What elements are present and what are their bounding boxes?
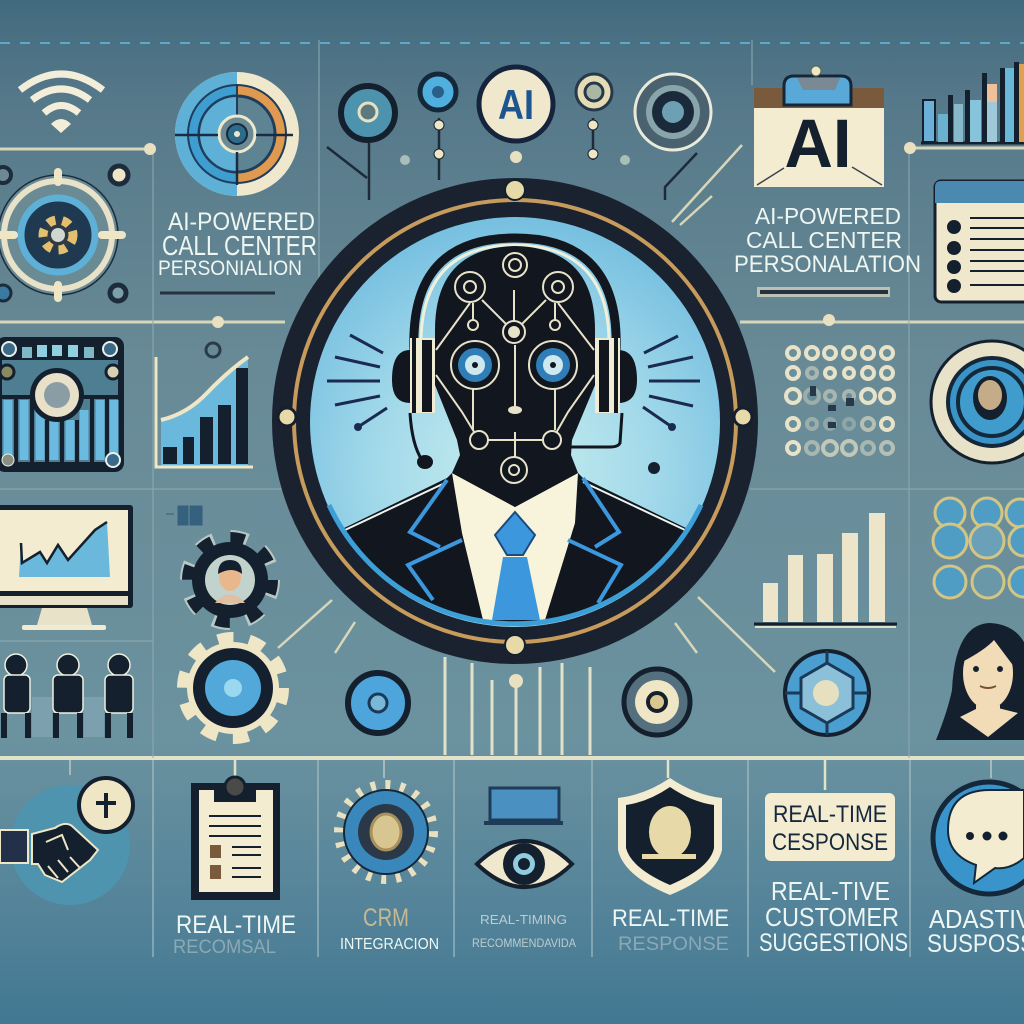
icon: bar chart top right: [921, 62, 1024, 143]
bottom labels: RECOMMENDAVIDA: [472, 936, 576, 950]
callout: real-time response: [765, 793, 895, 861]
icon: shield: [618, 778, 722, 895]
bottom labels: SUGGESTIONS: [759, 929, 908, 957]
top dashed line: [0, 42, 1024, 44]
bottom labels: CUSTOMER: [765, 902, 899, 932]
central circle badge: [272, 178, 758, 664]
bottom labels: INTEGRACION: [340, 936, 439, 953]
left heading: [158, 208, 317, 293]
lower ring icons: [348, 651, 869, 735]
icon: wifi: [20, 74, 103, 133]
icon: person gear: [187, 537, 273, 623]
bottom labels: [173, 876, 1024, 958]
left heading: CALL CENTER: [162, 230, 317, 261]
icon: speech bubble: [933, 782, 1024, 894]
left heading: PERSONIALION: [158, 257, 302, 280]
icon: woman portrait: [936, 623, 1024, 740]
icon: AI envelope: AI: [784, 105, 852, 182]
icon: target dial: [175, 72, 299, 196]
right panel: dot matrix: [786, 347, 894, 455]
icon: left grid panel: [0, 337, 124, 472]
right heading: CALL CENTER: [746, 227, 902, 253]
right heading: AI-POWERED: [755, 203, 901, 229]
icon: right profile ring: [931, 341, 1024, 463]
icon: handshake: [0, 778, 133, 905]
callout: real-time response: REAL-TIME: [773, 801, 887, 828]
bottom labels: RESPONSE: [618, 934, 729, 955]
icon: blue gear: [184, 639, 282, 737]
bottom labels: REAL-TIME: [612, 905, 729, 932]
icon: right circle grid: [933, 498, 1024, 598]
icon: eye: [477, 841, 572, 887]
robot agent figure: [327, 238, 700, 640]
bottom labels: REAL-TIVE: [771, 876, 890, 906]
icon: laptop: [484, 788, 563, 825]
icon: monitor: [0, 505, 133, 630]
icon: list window: [935, 181, 1024, 302]
icon: clipboard: [191, 777, 280, 900]
icon: left gear ring: [0, 166, 128, 301]
bottom labels: REAL-TIME: [176, 911, 296, 939]
icon: sun badge: [339, 785, 433, 879]
bottom labels: CRM: [363, 904, 409, 932]
icon: bars right: [754, 513, 897, 627]
bottom labels: RECOMSAL: [173, 937, 276, 958]
icon: three people: [4, 654, 133, 738]
panel: bottom row: [0, 777, 1024, 958]
icon: AI envelope: [754, 66, 884, 187]
top icon row: [341, 67, 711, 159]
right heading: [734, 203, 921, 292]
right heading: PERSONALATION: [734, 251, 921, 278]
callout: real-time response: CESPONSE: [772, 829, 888, 856]
top icon row: AI: [498, 81, 534, 128]
icon: growth chart: [156, 343, 253, 525]
bottom labels: REAL-TIMING: [480, 912, 567, 927]
left heading: AI-POWERED: [168, 208, 315, 236]
